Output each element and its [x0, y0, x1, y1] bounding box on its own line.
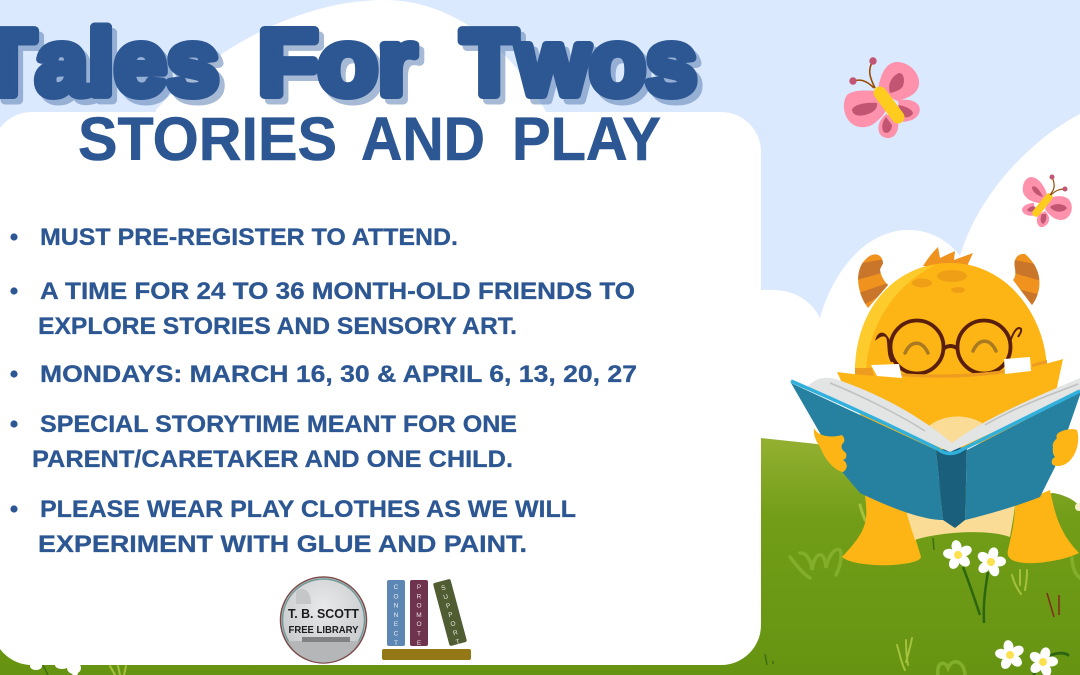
book: promote: E	[417, 640, 422, 647]
monster smile eyes	[905, 341, 996, 353]
subtitle: Stories and Play: PLAY	[512, 105, 661, 173]
title: Tales For Twos	[0, 10, 702, 120]
bookshelf	[382, 649, 471, 660]
book: promote: R	[417, 593, 422, 600]
red grass blades	[1047, 593, 1059, 617]
monster glasses	[877, 320, 1021, 374]
logo: T. B. Scott Free Library: T. B. SCOTT	[288, 606, 359, 621]
butterfly: large	[844, 57, 920, 138]
book: connect: C	[394, 584, 399, 591]
book: support: S	[441, 584, 447, 592]
book: connect: N	[394, 603, 399, 610]
small white flowers at panel edge	[30, 503, 1080, 675]
details bullet list: PARENT/CARETAKER AND ONE CHILD.	[32, 446, 513, 473]
monster belly	[905, 505, 1015, 540]
subtitle: Stories and Play: AND	[361, 105, 485, 173]
monster horns	[858, 254, 1040, 308]
book: connect: C	[394, 630, 399, 638]
butterfly: small	[1022, 174, 1072, 227]
book: support: P	[448, 611, 454, 619]
monster collar	[837, 359, 1063, 470]
book: support	[433, 579, 468, 648]
title: Tales For Twos: Twos	[461, 10, 697, 114]
details bullet list: EXPLORE STORIES AND SENSORY ART.	[38, 313, 517, 340]
book: support: P	[445, 602, 451, 610]
open book	[791, 378, 1080, 528]
daisy flowers	[940, 537, 1062, 675]
monster crest	[923, 247, 973, 268]
details bullet list: PLEASE WEAR PLAY CLOTHES AS WE WILL	[40, 496, 576, 523]
subtitle: Stories and Play	[78, 105, 661, 173]
monster legs	[842, 495, 921, 565]
details bullet list: MUST PRE-REGISTER TO ATTEND.	[40, 224, 458, 251]
monster head	[855, 263, 1047, 390]
subtitle: Stories and Play: STORIES	[78, 105, 337, 173]
book: promote: O	[416, 603, 422, 610]
book: promote: P	[417, 584, 421, 591]
book: connect	[387, 580, 405, 647]
monster tummy	[925, 416, 990, 450]
book: connect: E	[394, 621, 399, 628]
book: connect: O	[393, 593, 399, 600]
monster reading a book	[791, 247, 1080, 565]
dark grass marks	[43, 538, 934, 675]
book: support: O	[450, 620, 457, 628]
white clouds	[156, 0, 1080, 520]
monster hands	[814, 428, 847, 472]
logo: T. B. Scott Free Library: FREE LIBRARY	[288, 625, 359, 636]
logo: T. B. Scott Free Library	[280, 577, 366, 663]
book: support: R	[452, 629, 459, 637]
title: Tales For Twos: For	[263, 16, 421, 120]
monster teeth patches	[871, 357, 1031, 378]
details bullet list	[10, 224, 637, 558]
book: promote: O	[416, 621, 422, 628]
book: connect: N	[394, 612, 399, 619]
logo: connect promote support books	[382, 579, 471, 660]
book: promote	[410, 580, 428, 647]
details bullet list: SPECIAL STORYTIME MEANT FOR ONE	[40, 411, 517, 438]
book: promote: M	[416, 612, 422, 619]
book: support: T	[455, 638, 461, 646]
details bullet list: MONDAYS: MARCH 16, 30 & APRIL 6, 13, 20, 27	[40, 361, 637, 388]
title: Tales For Twos: For	[258, 10, 416, 114]
book: promote: T	[417, 630, 421, 638]
grass tufts	[110, 505, 1080, 675]
grass hill	[0, 438, 1080, 675]
white content panel	[0, 112, 761, 665]
book: connect: T	[394, 640, 398, 647]
title: Tales For Twos: Twos	[466, 16, 702, 120]
details bullet list: EXPERIMENT WITH GLUE AND PAINT.	[38, 531, 527, 558]
details bullet list: A TIME FOR 24 TO 36 MONTH-OLD FRIENDS TO	[40, 278, 635, 305]
book: support: U	[443, 593, 449, 601]
